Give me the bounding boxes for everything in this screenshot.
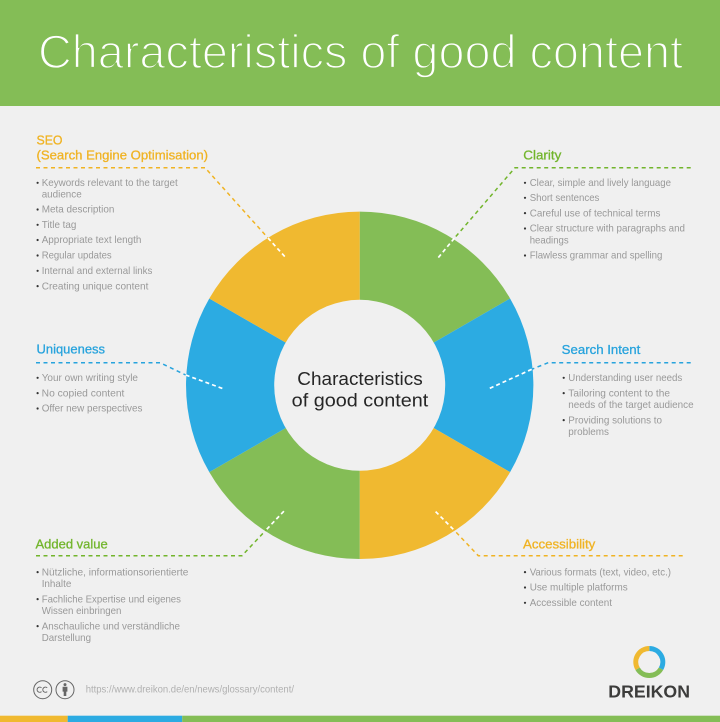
SEO connector [36, 168, 286, 258]
Clarity list: Clear, simple and lively language [530, 178, 671, 189]
Accessibility connector [434, 510, 683, 556]
SEO heading: (Search Engine Optimisation) [36, 147, 208, 162]
Search Intent list: Tailoring content to the [568, 388, 670, 399]
centre label: Characteristics [297, 368, 423, 389]
Clarity heading: Clarity [523, 147, 562, 162]
centre label: of good content [292, 390, 428, 411]
bottom colour bar [0, 716, 720, 722]
Search Intent heading: Search Intent [562, 342, 641, 357]
Added value heading: Added value [36, 537, 108, 552]
panel: Uniqueness [36, 341, 224, 415]
Accessibility list: Use multiple platforms [530, 583, 628, 594]
Search Intent connector [488, 363, 691, 389]
SEO list: Creating unique content [42, 281, 149, 292]
logo: DREIKON [608, 648, 690, 701]
segment: SEO [209, 212, 360, 385]
Search Intent list [563, 373, 694, 438]
Clarity list: Flawless grammar and spelling [530, 251, 663, 262]
segment: Accessibility [360, 385, 510, 559]
Clarity connector [438, 168, 691, 258]
logo ring [636, 648, 663, 676]
Added value list: Anschauliche und verständliche [42, 621, 180, 632]
segment: Clarity [360, 212, 510, 385]
Accessibility heading: Accessibility [523, 537, 596, 552]
Clarity list: Clear structure with paragraphs and [530, 224, 685, 235]
Uniqueness list: Your own writing style [42, 373, 138, 384]
Added value list: Fachliche Expertise und eigenes [42, 594, 181, 605]
Accessibility list: Various formats (text, video, etc.) [530, 567, 671, 578]
centre label [292, 368, 428, 411]
Added value list: Inhalte [42, 579, 72, 590]
panel: Search Intent [488, 342, 694, 438]
donut chart [186, 212, 533, 559]
Added value list: Darstellung [42, 633, 91, 644]
SEO list: Keywords relevant to the target [42, 178, 178, 189]
Search Intent list: needs of the target audience [568, 400, 694, 411]
segment: Search Intent [360, 298, 533, 472]
Clarity list: Short sentences [530, 193, 599, 204]
Clarity list [524, 178, 685, 262]
Clarity list: headings [530, 235, 569, 246]
SEO heading [36, 132, 208, 162]
Uniqueness list [36, 373, 142, 415]
Accessibility list [524, 567, 671, 609]
Search Intent list: Understanding user needs [568, 373, 682, 384]
Search Intent list: Providing solutions to [568, 415, 662, 426]
Clarity list: Careful use of technical terms [530, 208, 660, 219]
title: Characteristics of good content [38, 25, 683, 78]
SEO list: Meta description [42, 205, 114, 216]
donut centre [274, 300, 445, 471]
Uniqueness heading: Uniqueness [36, 341, 105, 356]
panel: Clarity [438, 147, 691, 262]
segment: Uniqueness [186, 298, 360, 472]
SEO list: Title tag [42, 220, 77, 231]
SEO list: Regular updates [42, 251, 112, 262]
Added value connector [36, 510, 285, 556]
Uniqueness list: Offer new perspectives [42, 404, 142, 415]
icon: attribution person [56, 681, 74, 699]
Added value list: Nützliche, informationsorientierte [42, 567, 189, 578]
source url: https://www.dreikon.de/en/news/glossary/content/ [86, 685, 294, 696]
Uniqueness list: No copied content [42, 388, 125, 399]
Search Intent list: problems [568, 427, 609, 438]
SEO list: Appropriate text length [42, 235, 141, 246]
icon: creative commons [34, 681, 52, 699]
SEO list [36, 178, 178, 292]
logo wordmark: DREIKON [608, 681, 690, 701]
segment: Added value [209, 385, 360, 559]
SEO list: Internal and external links [42, 266, 152, 277]
panel: Added value [36, 510, 285, 644]
Uniqueness connector [36, 363, 224, 389]
panel: Accessibility [434, 510, 683, 609]
Added value list: Wissen einbringen [42, 606, 121, 617]
Accessibility list: Accessible content [530, 598, 612, 609]
SEO list: audience [42, 190, 82, 200]
Added value list [36, 567, 189, 644]
panel: SEO [36, 132, 286, 292]
title banner [0, 0, 720, 106]
SEO heading: SEO [36, 132, 62, 148]
